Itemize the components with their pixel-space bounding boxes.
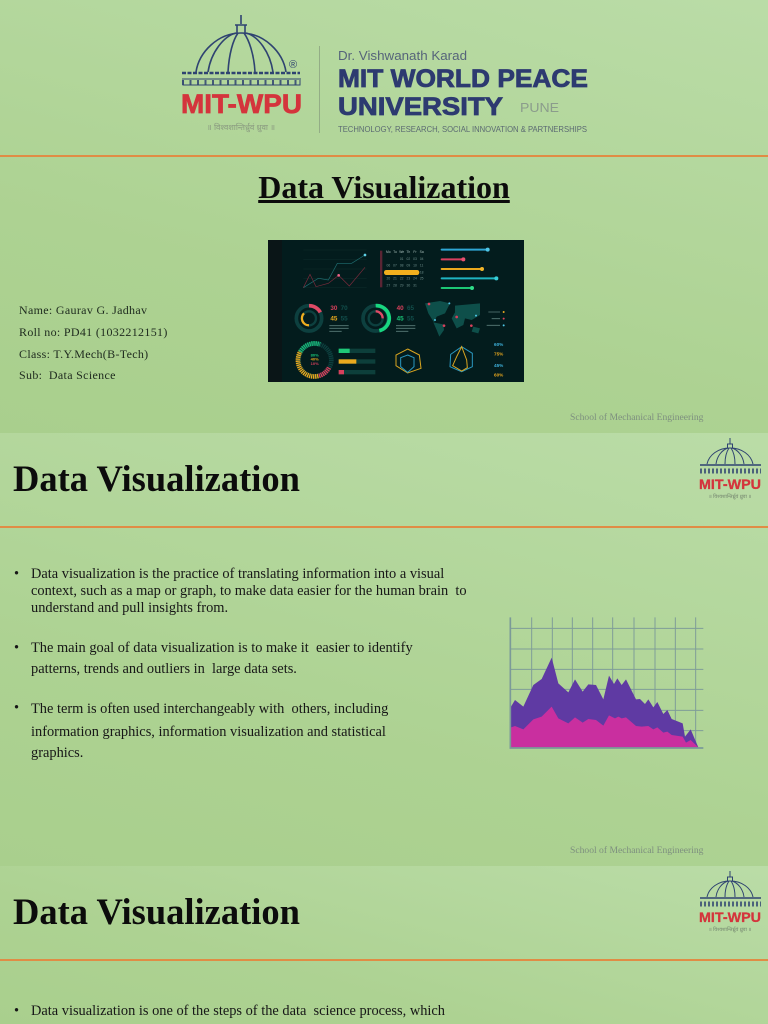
bullet 3: • (14, 700, 19, 716)
calendar: Sa (420, 250, 424, 254)
calendar: 29 (400, 284, 404, 288)
gauge numbers: 45 (397, 316, 404, 323)
slide heading: Data Visualization (13, 891, 300, 932)
calendar: 02 (406, 257, 410, 261)
percentage list: 75% (494, 352, 504, 357)
bullet 1: understand and pull insights from. (31, 600, 228, 616)
calendar: Mo (386, 250, 391, 254)
map pins (428, 302, 477, 327)
calendar: 22 (400, 277, 404, 281)
footer text: School of Mechanical Engineering (570, 845, 703, 856)
calendar: 07 (393, 263, 397, 267)
slide 2: definition (0, 433, 768, 866)
calendar: 03 (413, 257, 417, 261)
calendar: 23 (406, 277, 410, 281)
gauge numbers: 65 (407, 305, 415, 312)
calendar: 30 (406, 284, 410, 288)
logo line: Pune: PUNE (520, 100, 559, 115)
calendar: 11 (420, 263, 424, 267)
percentage list: 45% (494, 363, 504, 368)
bullet text: Data visualization is one of the steps of the data science process, which (31, 1003, 445, 1019)
donut gauges (296, 306, 389, 331)
calendar: 06 (386, 263, 390, 267)
calendar: 28 (393, 284, 397, 288)
logo wordmark: MIT-WPU: MIT-WPU (181, 89, 302, 119)
logo motto: ॥ विश्वशान्तिर्ध्रुवं ध्रुवा ॥ (207, 122, 275, 133)
logo motto: ॥ विश्वशान्तिर्ध्रुवं ध्रुवा ॥ (709, 493, 751, 500)
calendar: We (399, 250, 404, 254)
gauge numbers (330, 305, 415, 323)
bullet 2 (14, 640, 413, 677)
bullet text: • (14, 1003, 19, 1019)
logo line: Dr. Vishwanath Karad: Dr. Vishwanath Karad (338, 48, 467, 63)
calendar: 25 (420, 277, 424, 281)
registered mark: ® (289, 59, 297, 71)
divider line (0, 526, 768, 528)
small logo (699, 871, 761, 933)
icon: dome emblem (182, 15, 301, 85)
bullet 1: context, such as a map or graph, to make data easier for the human brain to (31, 583, 467, 599)
slide heading: Data Visualization (13, 458, 300, 499)
dashboard image (268, 240, 524, 382)
calendar (380, 250, 424, 288)
gauge numbers: 30 (330, 305, 338, 312)
bullet 1 (14, 566, 467, 616)
calendar: 18 (420, 271, 424, 275)
radial percentages: 10% (311, 361, 319, 366)
icon: dome emblem (700, 438, 761, 471)
bullet 3 (14, 700, 388, 761)
caption lines (329, 326, 415, 331)
calendar: Tu (393, 250, 397, 254)
calendar: 31 (413, 284, 417, 288)
percentage list: 60% (494, 342, 504, 347)
radial percentages (311, 352, 319, 366)
slide 3: process (0, 866, 768, 1024)
logo line: University: UNIVERSITY (338, 93, 503, 121)
calendar: Fr (413, 250, 417, 254)
calendar: 24 (413, 277, 417, 281)
author details (19, 303, 168, 382)
bullet 2: patterns, trends and outliers in large data sets. (31, 661, 297, 677)
slide 1: cover (0, 0, 768, 433)
chart axes (510, 617, 703, 748)
line chart (303, 250, 367, 288)
gauge numbers: 55 (341, 316, 348, 323)
gauge numbers: 55 (407, 316, 415, 323)
calendar: 10 (413, 263, 417, 267)
icon: dome emblem (700, 871, 761, 904)
logo wordmark: MIT-WPU (699, 909, 761, 925)
bullet 3: The term is often used interchangeably with others, including (31, 701, 388, 717)
gauge numbers: 40 (397, 305, 404, 312)
chart grid (511, 617, 703, 747)
radial percentages: 80% (311, 352, 319, 357)
bullet 1: Data visualization is the practice of translating information into a visual (31, 566, 444, 582)
subject: Sub: Data Science (19, 368, 116, 382)
calendar: 27 (386, 284, 390, 288)
percentage list: 60% (494, 372, 504, 377)
gauge numbers: 45 (330, 316, 338, 323)
percentage list (494, 342, 504, 377)
divider line (0, 959, 768, 961)
horizontal bars (442, 248, 498, 290)
bullet 2: • (14, 640, 19, 656)
progress bars (339, 349, 375, 374)
map legend (487, 311, 505, 326)
logo wordmark: MIT-WPU (699, 476, 761, 492)
calendar: 01 (400, 257, 404, 261)
bullet 2: The main goal of data visualization is to make it easier to identify (31, 640, 413, 656)
bullet 1: • (14, 566, 19, 582)
radial percentages: 40% (311, 357, 319, 362)
name: Name: Gaurav G. Jadhav (19, 303, 147, 317)
purple area series (511, 658, 698, 747)
radial gauge (298, 343, 331, 377)
calendar: 09 (406, 263, 410, 267)
calendar: 08 (400, 263, 404, 267)
class: Class: T.Y.Mech(B-Tech) (19, 347, 148, 361)
calendar: 21 (393, 277, 397, 281)
area chart (510, 617, 704, 749)
calendar: 04 (420, 257, 424, 261)
footer text: School of Mechanical Engineering (570, 412, 703, 423)
bullet text (14, 566, 467, 761)
calendar: 20 (386, 277, 390, 281)
bullet 3: graphics. (31, 745, 83, 761)
logo motto: ॥ विश्वशान्तिर्ध्रुवं ध्रुवा ॥ (709, 926, 751, 933)
world map (425, 301, 480, 337)
pink area series (511, 707, 698, 747)
logo divider (318, 46, 320, 133)
small logo (699, 438, 761, 500)
calendar: Th (406, 250, 410, 254)
logo line: MIT World Peace: MIT WORLD PEACE (338, 65, 588, 93)
roll number: Roll no: PD41 (1032212151) (19, 325, 168, 339)
divider line (0, 155, 768, 157)
gauge numbers: 70 (341, 305, 348, 312)
radar charts (396, 347, 472, 373)
cover title: Data Visualization (258, 169, 510, 205)
bullet 3: information graphics, information visualization and statistical (31, 724, 386, 740)
university logo (181, 15, 588, 134)
